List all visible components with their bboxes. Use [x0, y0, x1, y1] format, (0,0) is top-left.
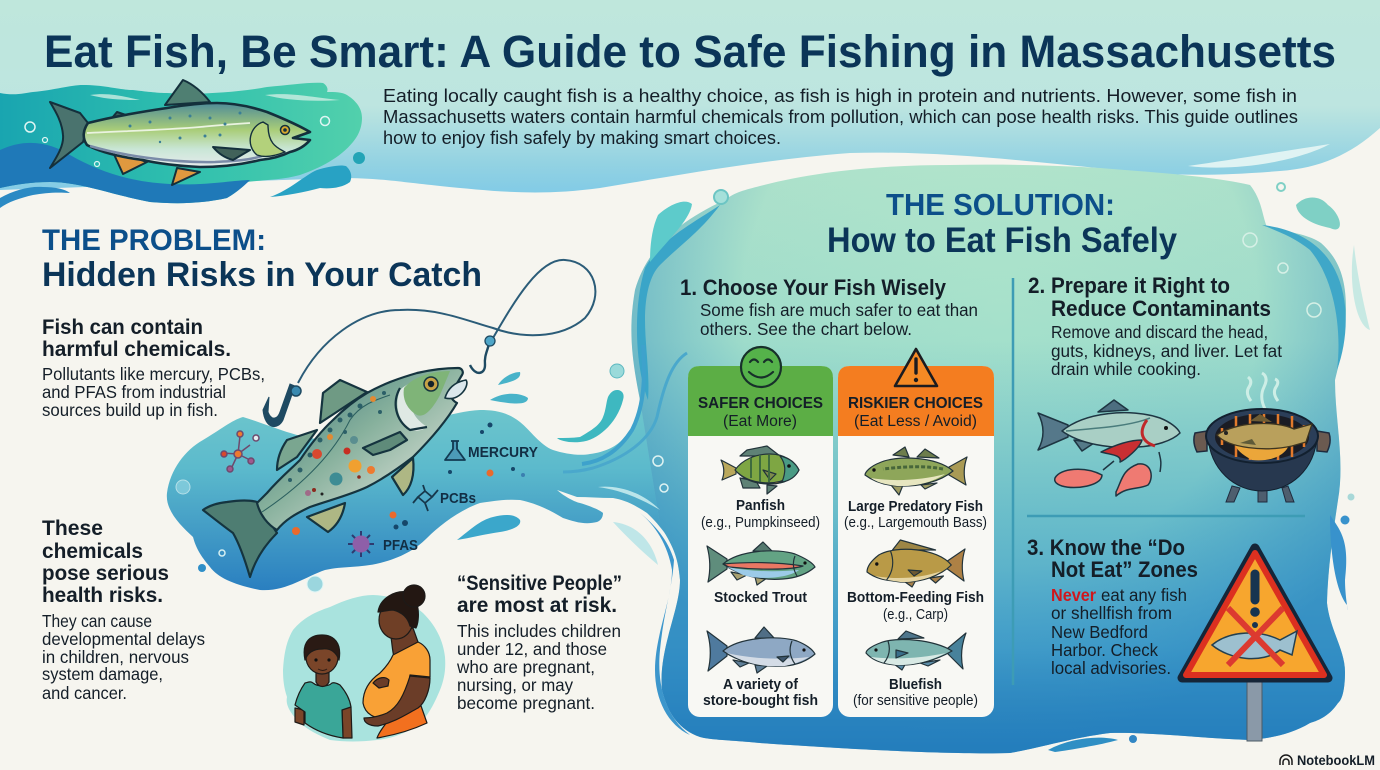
- intro text: Massachusetts waters contain harmful chemicals from pollution, which can pose health risks. This guide outlines: [383, 107, 1298, 127]
- water stream and left blob: [167, 345, 760, 590]
- icon: warning triangle: [895, 349, 937, 386]
- text: sensitive people: are most at risk.: [457, 594, 617, 617]
- step 2 text: Reduce Contaminants: [1051, 296, 1271, 321]
- solution edge shading: [631, 165, 1346, 753]
- text: sensitive people: nursing, or may: [457, 675, 573, 695]
- text: health risks: They can cause: [42, 611, 152, 631]
- icon: do not eat sign: [1182, 548, 1328, 741]
- label: PCBs: PCBs: [440, 491, 476, 507]
- panel: riskier choices: Bluefish: [889, 677, 942, 693]
- text: harmful chemicals: sources build up in fish.: [42, 400, 218, 420]
- icon: panfish: [721, 446, 799, 494]
- heading: the solution: THE SOLUTION:: [886, 187, 1115, 222]
- icon: stocked trout: [707, 542, 815, 585]
- label: PFAS: PFAS: [383, 538, 418, 554]
- text: sensitive people: This includes children: [457, 621, 621, 641]
- text: sensitive people: become pregnant.: [457, 693, 595, 713]
- step 3 text: eat any fish: [1101, 585, 1187, 605]
- text: harmful chemicals: and PFAS from industrial: [42, 382, 226, 402]
- icon: store-bought fish: [707, 627, 815, 673]
- panel: safer choices: Stocked Trout: [714, 590, 807, 606]
- step 1 text: 1. Choose Your Fish Wisely: [680, 275, 947, 300]
- label: PCBs: [413, 485, 476, 511]
- panel: safer choices: A variety of: [723, 677, 798, 693]
- water splashes: [457, 183, 1370, 752]
- notebooklm mark: NotebookLM: [1297, 752, 1375, 768]
- wave highlight: [1188, 144, 1330, 168]
- heading: the problem: Hidden Risks in Your Catch: [42, 256, 482, 294]
- title: Eat Fish, Be Smart: A Guide to Safe Fishing in Massachusetts: [44, 26, 1336, 77]
- heading: the solution: How to Eat Fish Safely: [827, 221, 1177, 260]
- step 3 text: New Bedford: [1051, 622, 1148, 642]
- text: health risks: [42, 517, 205, 703]
- step 2 text: [1028, 273, 1282, 379]
- panel: safer choices: (e.g., Pumpkinseed): [701, 515, 820, 531]
- panel: safer choices: (Eat More): [723, 413, 797, 430]
- text: health risks: These: [42, 517, 103, 540]
- panel: riskier choices: [838, 349, 994, 717]
- step 3 text: Not Eat” Zones: [1051, 557, 1198, 582]
- water blob behind top fish: [0, 83, 365, 208]
- step 1 text: Some fish are much safer to eat than: [700, 300, 978, 320]
- label: PFAS: [348, 531, 418, 557]
- heading: the problem: THE PROBLEM:: [42, 224, 266, 257]
- icon: smiley: [741, 347, 781, 387]
- mother: [363, 585, 430, 738]
- text: health risks: chemicals: [42, 540, 143, 563]
- icon: hooked contaminated fish with line: [203, 260, 595, 577]
- panel: safer choices: [688, 347, 833, 717]
- panel: riskier choices: Bottom-Feeding Fish: [847, 590, 984, 606]
- label: mercury: MERCURY: [468, 445, 538, 461]
- text: harmful chemicals: [42, 316, 265, 420]
- step 1 text: [680, 275, 978, 339]
- panel: riskier choices: RISKIER CHOICES: [848, 395, 983, 412]
- center fish: [203, 368, 467, 577]
- text: harmful chemicals: Fish can contain: [42, 316, 203, 339]
- icon: grill: [1194, 373, 1330, 502]
- intro text: [383, 86, 1298, 148]
- icon: fish being cleaned: [1038, 400, 1180, 496]
- step 3 text: Never: [1051, 585, 1096, 605]
- text: health risks: in children, nervous: [42, 647, 189, 667]
- label: mercury: [445, 441, 538, 461]
- icon: left molecule: [221, 431, 259, 472]
- icon: top fish: [50, 80, 310, 185]
- step 1 text: others. See the chart below.: [700, 319, 912, 339]
- intro text: how to enjoy fish safely by making smart choices.: [383, 128, 781, 148]
- heading: the problem: [42, 224, 482, 294]
- panel: safer choices: SAFER CHOICES: [698, 395, 823, 412]
- text: sensitive people: under 12, and those: [457, 639, 607, 659]
- panel: riskier choices: (Eat Less / Avoid): [854, 413, 977, 430]
- contaminant dots: [176, 422, 525, 592]
- step 3 text: 3. Know the “Do: [1027, 535, 1185, 560]
- text: sensitive people: who are pregnant,: [456, 657, 595, 677]
- step 3 text: or shellfish from: [1051, 603, 1172, 623]
- text: health risks: health risks.: [42, 584, 163, 607]
- text: health risks: pose serious: [42, 562, 169, 585]
- text: harmful chemicals: Pollutants like mercury, PCBs,: [42, 364, 265, 384]
- step 3 text: local advisories.: [1051, 658, 1171, 678]
- dividers: [1013, 278, 1305, 685]
- heading: the solution: [827, 187, 1177, 260]
- panel: riskier choices: (for sensitive people): [853, 693, 978, 709]
- text: sensitive people: [456, 572, 622, 713]
- text: sensitive people: “Sensitive People”: [457, 572, 622, 595]
- panel: riskier choices: Large Predatory Fish: [848, 499, 983, 515]
- step 3 text: Harbor. Check: [1051, 640, 1158, 660]
- panel: solution water blob: [631, 165, 1346, 753]
- step 2 text: 2. Prepare it Right to: [1028, 273, 1230, 298]
- illustration: child and pregnant mother: [283, 585, 445, 742]
- text: health risks: developmental delays: [42, 629, 205, 649]
- panel: riskier choices: (e.g., Largemouth Bass): [844, 515, 987, 531]
- text: health risks: and cancer.: [42, 683, 127, 703]
- step 2 text: drain while cooking.: [1051, 359, 1201, 379]
- panel: riskier choices: (e.g., Carp): [883, 607, 948, 623]
- panel: safer choices: Panfish: [736, 498, 785, 514]
- top water band: [0, 0, 1380, 192]
- icon: largemouth bass: [865, 447, 967, 495]
- text: health risks: system damage,: [42, 664, 163, 684]
- step 2 text: guts, kidneys, and liver. Let fat: [1051, 341, 1282, 361]
- intro text: Eating locally caught fish is a healthy choice, as fish is high in protein and nutrients. However, some fish in: [383, 86, 1297, 106]
- step 3 text: [1027, 535, 1198, 678]
- text: harmful chemicals: harmful chemicals.: [42, 338, 231, 361]
- step 2 text: Remove and discard the head,: [1051, 322, 1268, 342]
- icon: carp: [867, 540, 965, 587]
- child: [295, 635, 352, 738]
- panel: safer choices: store-bought fish: [703, 693, 818, 709]
- icon: bluefish: [866, 631, 966, 670]
